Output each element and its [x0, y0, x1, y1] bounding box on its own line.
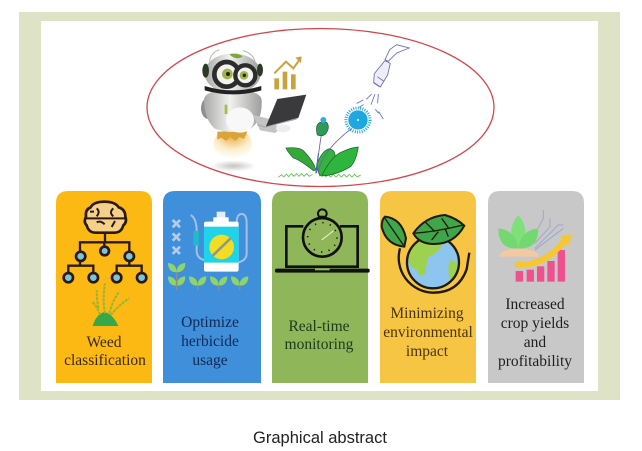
ellipse: red outline	[147, 28, 494, 186]
label: increased crop yields and profitability: crop yields	[501, 315, 569, 332]
icon: dandelion weed	[278, 108, 370, 177]
label: minimizing environmental impact: environmental	[383, 324, 473, 341]
icon: growth chart	[274, 56, 302, 89]
label: minimizing environmental impact: impact	[406, 343, 449, 360]
card: weed classification	[56, 191, 152, 383]
icon: sprayer and seedlings	[168, 212, 248, 290]
panel: white inner background	[41, 21, 598, 391]
card: increased crop yields and profitability	[488, 191, 584, 383]
icon: earth with leaves	[382, 215, 469, 293]
label: real-time monitoring: monitoring	[285, 336, 354, 353]
label: optimize herbicide usage: usage	[192, 352, 228, 369]
icon: plant, circuit and rising bars	[498, 210, 572, 282]
label: weed classification: classification	[64, 352, 146, 369]
icon: brain with decision tree	[64, 202, 146, 282]
label: minimizing environmental impact: Minimizing	[390, 305, 464, 322]
card: optimize herbicide usage	[163, 191, 261, 383]
icon: laptop with stopwatch	[275, 209, 370, 273]
icon: robot with laptop	[201, 50, 306, 172]
label: real-time monitoring: Real-time	[288, 318, 350, 335]
caption: Graphical abstract	[253, 429, 387, 447]
card: real-time monitoring	[272, 191, 370, 383]
label: weed classification: Weed	[87, 334, 122, 351]
label: increased crop yields and profitability: profitability	[498, 353, 572, 370]
label: optimize herbicide usage: herbicide	[181, 333, 239, 350]
icon: spray nozzle	[357, 45, 409, 119]
card: minimizing environmental impact	[380, 191, 476, 383]
label: increased crop yields and profitability: and	[524, 334, 546, 351]
icon: weed plant	[92, 283, 129, 326]
label: optimize herbicide usage: Optimize	[181, 314, 239, 331]
label: increased crop yields and profitability: Increased	[505, 296, 565, 313]
